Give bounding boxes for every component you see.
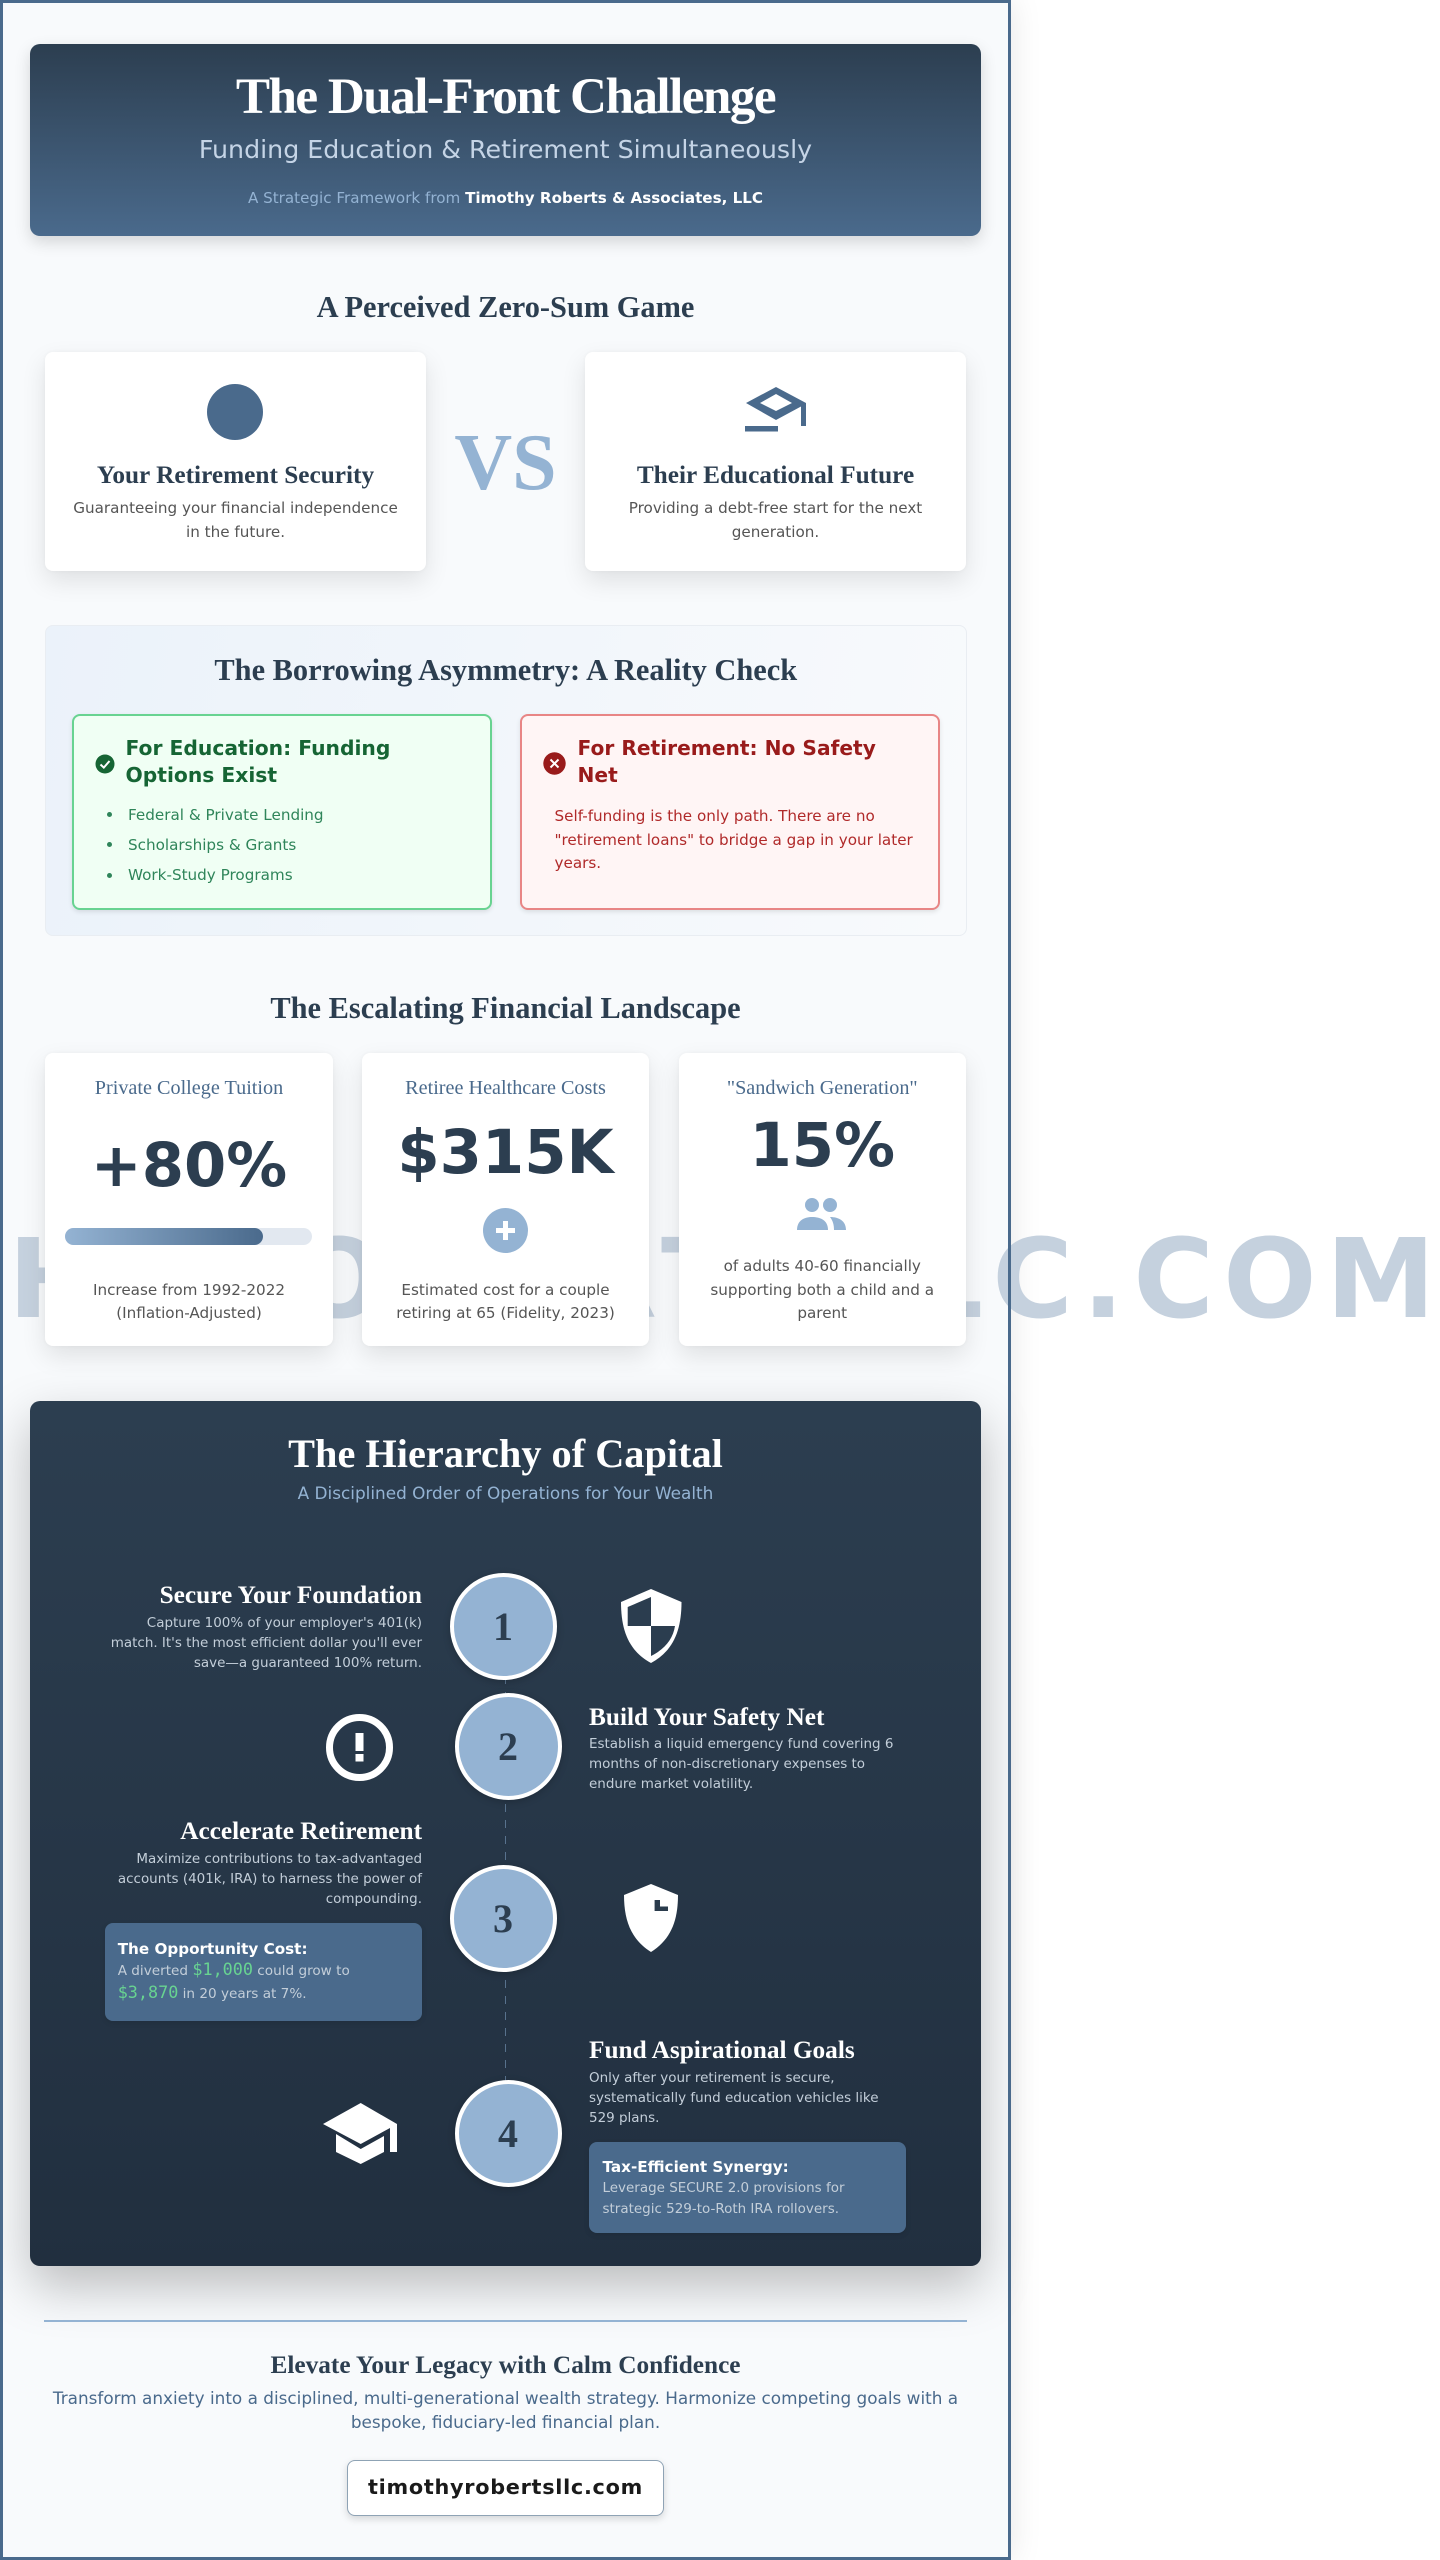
card description: generation. [732,523,819,541]
callout text [118,1958,350,2002]
step text: months of non-discretionary expenses to [589,1756,865,1772]
card description: in the future. [186,523,285,541]
panel: borrowing asymmetry [45,625,966,936]
icon: shield [621,1589,682,1663]
retirement text: years. [554,854,601,872]
panel: sandwich stat [678,1053,966,1346]
step text: systematically fund education vehicles like [589,2090,878,2106]
retirement heading: Net [578,763,618,787]
step text: Capture 100% of your employer's 401(k) [147,1614,422,1630]
callout text: A diverted $1,000 could grow to [118,1958,350,1978]
icon: retirement circle [207,384,263,440]
retirement heading: For Retirement: No Safety [578,736,876,760]
callout: tax synergy [589,2142,906,2233]
number 3 [450,1865,556,1972]
education heading: For Education: Funding [126,736,390,760]
card description: Providing a debt-free start for the next [629,499,922,517]
stat value: $315K [397,1118,614,1188]
callout text: $3,870 in 20 years at 7%. [118,1982,307,2002]
step title: Build Your Safety Net [589,1703,824,1731]
stat label: Retiree Healthcare Costs [405,1076,606,1098]
step text: save—a guaranteed 100% return. [194,1655,422,1671]
number 4: 4 [498,2110,518,2156]
panel: hierarchy of capital [30,1401,981,2266]
number 1: 1 [493,1604,513,1648]
progress fill [65,1228,263,1244]
website button: timothyrobertsllc.com [368,2475,643,2499]
retirement heading [578,736,876,787]
panel: retirement warning [520,714,940,910]
title: The Dual-Front Challenge [236,68,775,125]
panel: tuition stat [45,1053,333,1346]
education list: Federal & Private Lending [128,806,324,824]
stat label: Private College Tuition [95,1076,283,1098]
education heading: Options Exist [126,763,277,787]
step title: Secure Your Foundation [160,1581,422,1609]
icon: people [797,1198,846,1230]
education list: Work-Study Programs [128,866,293,884]
card description [629,499,922,541]
step 3 [105,1817,678,2021]
card title: Their Educational Future [637,461,914,489]
stat description [710,1257,934,1322]
icon: medical plus [483,1208,528,1253]
step text [589,2070,878,2126]
panel: healthcare stat [362,1053,649,1346]
step text: endure market volatility. [589,1776,753,1792]
number 1 [450,1572,556,1680]
education list [107,806,324,884]
panel: education card [585,352,966,571]
heading: landscape: The Escalating Financial Landscape [270,991,741,1025]
step text: match. It's the most efficient dollar you'll ever [111,1635,422,1651]
step 1 [111,1573,682,1684]
step text: Maximize contributions to tax-advantaged [136,1850,422,1866]
stat description: parent [797,1304,847,1322]
icon: check [96,754,114,774]
education list: Scholarships & Grants [128,836,296,854]
number 4 [454,2080,562,2186]
footer text: Transform anxiety into a disciplined, multi-generational wealth strategy. Harmonize competing goals with a [53,2388,958,2408]
card description [73,499,398,541]
VS label: VS [454,419,557,507]
education heading [126,736,390,787]
step 4 [323,2036,906,2233]
stat label: "Sandwich Generation" [727,1076,918,1098]
callout text [602,2180,845,2217]
retirement text: "retirement loans" to bridge a gap in your later [554,831,913,849]
callout title: Tax-Efficient Synergy: [602,2158,789,2176]
number 2 [454,1693,562,1800]
panel: education options [72,714,492,910]
callout text: strategic 529-to-Roth IRA rollovers. [602,2201,839,2217]
icon: alert circle [326,1714,393,1781]
step text [118,1850,422,1907]
number 3: 3 [493,1896,513,1941]
step title: Accelerate Retirement [180,1817,422,1845]
footer text: bespoke, fiduciary-led financial plan. [351,2412,660,2432]
hierarchy subtitle: A Disciplined Order of Operations for Your Wealth [298,1483,713,1503]
step 2 [326,1693,893,1801]
callout text: Leverage SECURE 2.0 provisions for [602,2180,844,2196]
stat description [396,1280,615,1322]
stat description: Increase from 1992-2022 [93,1280,285,1298]
stat description: Estimated cost for a couple [401,1280,610,1298]
header banner [30,44,981,236]
subtitle: Funding Education & Retirement Simultaneously [199,135,812,164]
stat description: supporting both a child and a [710,1280,934,1298]
step text: compounding. [326,1891,422,1907]
timeline connector [505,1660,506,2100]
heading: asymmetry: The Borrowing Asymmetry: A Reality Check [214,653,797,687]
retirement text: Self-funding is the only path. There are no [554,807,875,825]
progress bar [65,1228,312,1244]
step text [589,1736,893,1792]
step text: Only after your retirement is secure, [589,2070,835,2086]
hierarchy title: The Hierarchy of Capital [288,1431,723,1476]
page container [0,0,1011,2560]
footer text [52,2388,958,2432]
stat description [93,1280,285,1322]
step text [111,1614,422,1671]
stat description: of adults 40-60 financially [724,1257,921,1275]
website button [347,2460,664,2516]
step text: accounts (401k, IRA) to harness the power of [118,1871,422,1887]
footer [44,2320,967,2516]
icon: graduation cap outline [745,387,806,432]
stat value: +80% [91,1131,287,1201]
step title: Fund Aspirational Goals [589,2036,855,2064]
callout: opportunity cost [105,1923,422,2021]
step text: 529 plans. [589,2110,659,2126]
card title: Your Retirement Security [97,461,374,489]
attribution: A Strategic Framework from Timothy Roberts & Associates, LLC [248,189,763,207]
stat value: 15% [749,1111,895,1181]
number 2: 2 [498,1724,518,1769]
stat description: retiring at 65 (Fidelity, 2023) [396,1304,615,1322]
step text: Establish a liquid emergency fund covering 6 [589,1736,893,1752]
panel: retirement card [45,352,426,571]
stat description: (Inflation-Adjusted) [116,1304,262,1322]
icon: graduation cap [323,2103,397,2164]
callout title: The Opportunity Cost: [118,1940,308,1958]
heading: zero-sum: A Perceived Zero-Sum Game [317,290,694,324]
footer title: Elevate Your Legacy with Calm Confidence [270,2351,741,2379]
icon: shield clock [624,1884,678,1952]
icon: x mark [543,752,566,775]
card description: Guaranteeing your financial independence [73,499,398,517]
retirement text [554,807,913,872]
